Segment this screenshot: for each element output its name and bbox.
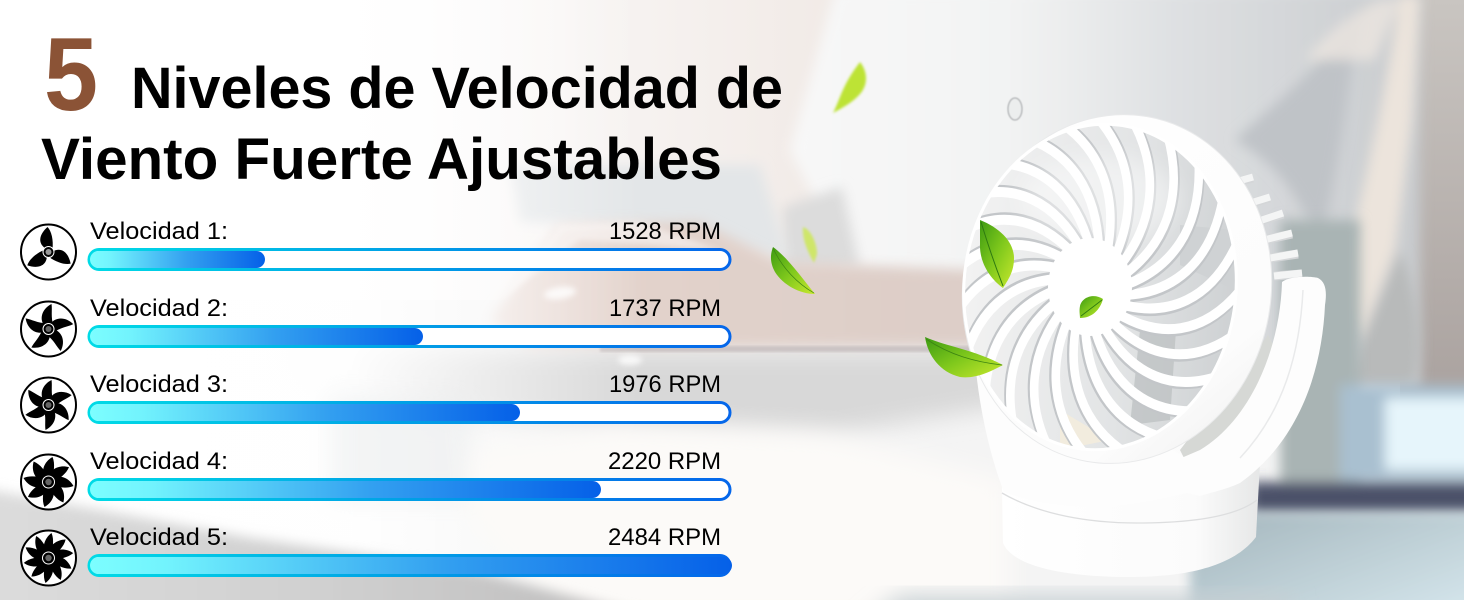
leaf: on hub (1080, 296, 1103, 318)
background sleeve (1235, 0, 1420, 385)
label: Velocidad 1: (90, 218, 228, 245)
icon: fan 5 blades (21, 302, 76, 356)
fan rear detail (965, 126, 1234, 448)
background foreground table (470, 425, 1010, 600)
fan bracket arm (1130, 277, 1326, 496)
background laptop (290, 352, 1010, 436)
icon: fan 3 blades (21, 224, 76, 280)
leaf: mid air (771, 247, 815, 294)
fan rear housing (975, 360, 1225, 507)
background left fade (0, 0, 640, 600)
background sleeve cuff shadow (783, 187, 860, 268)
background shirt front (510, 165, 790, 262)
speed row 3 (21, 371, 730, 432)
speed row 2 (21, 295, 730, 356)
value: 1976 RPM (609, 371, 721, 398)
bar (89, 402, 730, 422)
title number: 5 (44, 17, 98, 133)
fan wind glow (1020, 155, 1180, 245)
fan grille opening (948, 111, 1252, 463)
background right objects (1250, 220, 1464, 514)
bar (89, 250, 730, 270)
fan outer ring (935, 90, 1299, 488)
background wall right (1400, 0, 1464, 400)
leaf: blurred top (833, 62, 866, 113)
title (41, 17, 783, 192)
background shirt button (1008, 98, 1022, 120)
label: Velocidad 5: (90, 524, 228, 551)
value: 2220 RPM (608, 448, 721, 475)
bar (89, 556, 732, 576)
fan power button (1062, 495, 1090, 505)
label: Velocidad 3: (90, 371, 228, 398)
speed row 5 (21, 524, 732, 586)
value: 1737 RPM (609, 295, 721, 322)
background right floor (1190, 512, 1464, 600)
value: 1528 RPM (609, 218, 721, 245)
background arm shadow (600, 346, 990, 352)
background under fan floor (860, 596, 1290, 600)
background bottom left grey (0, 488, 660, 600)
background hand highlights (500, 222, 720, 365)
product: desk fan (925, 90, 1326, 577)
background left soft grey (330, 395, 480, 500)
bar (89, 480, 730, 500)
background top left (0, 0, 840, 300)
speed row 4 (21, 448, 730, 510)
background shirt (790, 0, 1420, 390)
fan hub (1048, 238, 1132, 336)
bar (89, 326, 730, 346)
value: 2484 RPM (608, 524, 721, 551)
leaf: upper left on fan (980, 220, 1014, 288)
speed row 1 (21, 218, 730, 280)
fan rear fins (1228, 177, 1302, 276)
fan stand base (1002, 440, 1260, 577)
icon: fan 8 blades (21, 454, 76, 510)
leaf: lower left (925, 337, 1003, 377)
fan inner rim (948, 111, 1252, 463)
leaf: blurred middle (803, 227, 817, 263)
title line 2: Viento Fuerte Ajustables (41, 127, 722, 192)
label: Velocidad 2: (90, 295, 228, 322)
leaves on the fan (925, 220, 1103, 377)
icon: fan 6 blades (21, 378, 76, 432)
fan spiral blades (965, 126, 1234, 448)
title line 1: Niveles de Velocidad de (131, 56, 783, 121)
label: Velocidad 4: (90, 448, 228, 475)
background hands and arm (490, 222, 1020, 348)
fan rear slats (1180, 335, 1276, 470)
icon: fan 10 blades (21, 530, 76, 586)
